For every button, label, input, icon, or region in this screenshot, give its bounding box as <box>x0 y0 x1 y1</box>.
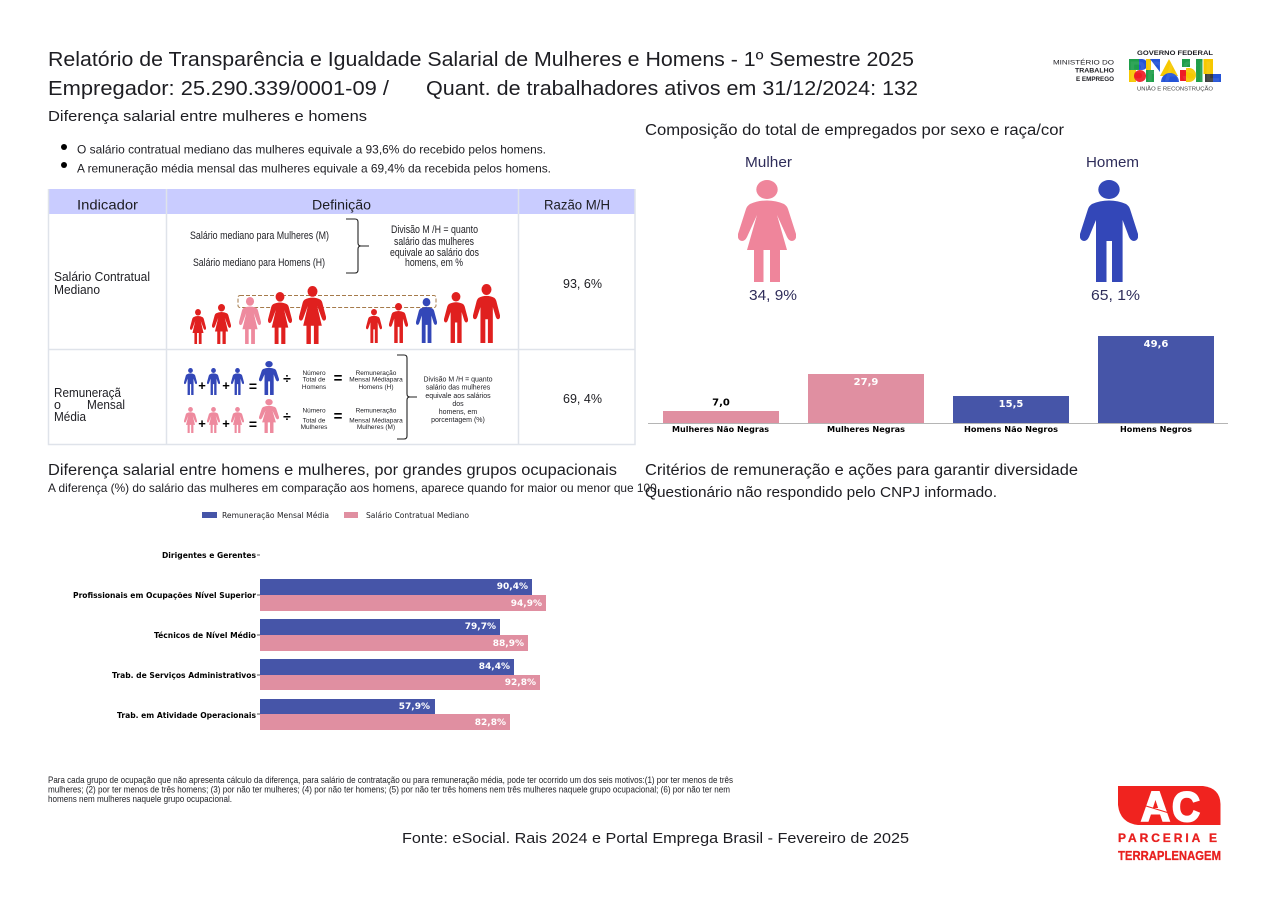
formula: remuneração média mulheres <box>184 399 403 433</box>
definition: salário mediano: salário das mulheres <box>394 236 474 248</box>
formula: remuneração média homens: Total de <box>303 376 326 384</box>
row label: remuneração média <box>54 386 125 424</box>
logo: AC Parceria e Terraplenagem <box>1118 783 1221 863</box>
bullet list: A remuneração média mensal das mulheres equivale a 69,4% da recebida pelos homens. <box>77 162 551 176</box>
bar chart: grupos ocupacionais: Profissionais em Ocupações Nível Superior <box>73 591 256 600</box>
formula: remuneração média mulheres: ÷ <box>283 408 291 424</box>
heading: diferença salarial: Diferença salarial entre mulheres e homens <box>48 108 367 125</box>
definition: divisão M/H remuneração: dos <box>452 401 464 408</box>
table header: Razão M/H <box>544 196 610 212</box>
logo: AC Parceria e Terraplenagem: C <box>1172 783 1200 830</box>
formula: remuneração média mulheres: Mulheres <box>301 424 328 431</box>
logo: Governo Federal Brasil: GOVERNO FEDERAL <box>1137 51 1213 57</box>
bar chart: grupos ocupacionais: Trab. de Serviços Administrativos <box>112 671 256 680</box>
footnote: Para cada grupo de ocupação que não apresenta cálculo da diferença, para salário de contratação ou para remuneração média, pode ter ocorrido um dos seis motivos:(1) por ter menos de três <box>48 775 733 785</box>
bar chart: composição por sexo e raça/cor: Homens Negros <box>1120 425 1192 434</box>
icon: homem 65,1% <box>1080 155 1140 304</box>
formula: remuneração média mulheres: Mensal Médiapara <box>349 418 403 424</box>
formula: remuneração média mulheres: = <box>249 416 257 432</box>
row label: salário contratual mediano <box>54 270 150 297</box>
definition: salário mediano <box>190 219 479 273</box>
bar chart: grupos ocupacionais: 57,9% <box>399 702 430 712</box>
icon: homem 65,1%: Homem <box>1086 155 1139 171</box>
heading: diferença por grupos ocupacionais: A diferença (%) do salário das mulheres em comparação aos homens, aparece quando for maior ou menor que 100. <box>48 481 660 495</box>
definition: divisão M/H remuneração: equivale aos salários <box>425 393 491 400</box>
logo: Ministério do Trabalho e Emprego: TRABALHO <box>1075 68 1114 74</box>
heading: critérios de remuneração: Critérios de remuneração e ações para garantir diversidade <box>645 462 1078 479</box>
bar chart: composição por sexo e raça/cor: Mulheres Não Negras <box>672 425 769 434</box>
value: razão remuneração média: 69, 4% <box>563 392 602 406</box>
bar chart: composição por sexo e raça/cor: Mulheres Negras <box>827 425 905 434</box>
bar chart: grupos ocupacionais: Dirigentes e Gerentes <box>162 551 256 560</box>
panel: tabela de indicadores <box>48 189 635 444</box>
row label: salário contratual mediano: Mediano <box>54 283 100 297</box>
definition: divisão M/H remuneração: porcentagem (%) <box>431 417 485 424</box>
bar chart: grupos ocupacionais <box>73 551 546 730</box>
definition: salário mediano: equivale ao salário dos <box>390 247 479 259</box>
logo: AC Parceria e Terraplenagem: A <box>1141 783 1170 830</box>
footnote <box>48 775 733 804</box>
bar chart: grupos ocupacionais: Trab. em Atividade Operacionais <box>117 711 256 720</box>
definition: divisão M/H remuneração: Divisão M /H = quanto <box>423 376 493 384</box>
logo: Ministério do Trabalho e Emprego: E EMPREGO <box>1076 77 1114 83</box>
logo: Ministério do Trabalho e Emprego <box>1053 60 1114 83</box>
formula: remuneração média mulheres: + <box>198 416 206 431</box>
bar chart: composição por sexo e raça/cor: 49,6 <box>1144 339 1168 350</box>
definition: salário mediano: Divisão M /H = quanto <box>391 224 478 236</box>
table header: Definição <box>312 196 371 212</box>
title: Empregador: 25.290.339/0001-09 / <box>48 78 389 100</box>
definition: salário mediano: Salário mediano para Mulheres (M) <box>190 230 329 242</box>
formula: remuneração média homens: Homens <box>302 384 327 391</box>
bar chart: grupos ocupacionais: 90,4% <box>497 582 528 592</box>
formula: remuneração média mulheres: = <box>334 408 343 425</box>
heading: diferença por grupos ocupacionais: Diferença salarial entre homens e mulheres, por grandes grupos ocupacionais <box>48 462 617 479</box>
bar chart: grupos ocupacionais: 94,9% <box>511 599 542 609</box>
formula: remuneração média homens: Homens (H) <box>358 384 394 391</box>
formula: remuneração média mulheres: Mulheres (M) <box>357 424 395 431</box>
bar chart: composição por sexo e raça/cor: 7,0 <box>712 398 730 408</box>
title: Quant. de trabalhadores ativos em 31/12/2024: 132 <box>426 78 918 100</box>
text: questionário não respondido: Questionário não respondido pelo CNPJ informado. <box>645 485 997 501</box>
source: Fonte: eSocial. Rais 2024 e Portal Emprega Brasil - Fevereiro de 2025 <box>402 830 909 847</box>
chart legend: Salário Contratual Mediano <box>366 511 469 520</box>
logo: AC Parceria e Terraplenagem: TERRAPLENAGEM <box>1118 849 1221 863</box>
formula: remuneração média homens: ÷ <box>283 370 291 386</box>
bar chart: composição por sexo e raça/cor <box>648 336 1228 434</box>
formula: remuneração média mulheres: Remuneração <box>356 408 397 414</box>
logo: Governo Federal Brasil: UNIÃO E RECONSTRUÇÃO <box>1137 86 1214 92</box>
formula: remuneração média mulheres: + <box>222 416 230 431</box>
formula: remuneração média homens: Mensal Médiapara <box>349 376 403 384</box>
title: Relatório de Transparência e Igualdade Salarial de Mulheres e Homens - 1º Semestre 2025 <box>48 49 914 71</box>
icon: homem 65,1%: 65, 1% <box>1091 288 1140 304</box>
value: razão salário contratual: 93, 6% <box>563 277 602 291</box>
bar chart: grupos ocupacionais: 88,9% <box>493 639 524 649</box>
formula: remuneração média mulheres: Total de <box>303 418 326 424</box>
icon: mulher 34,9%: Mulher <box>745 155 792 171</box>
row label: remuneração média: Média <box>54 410 86 424</box>
formula: remuneração média homens: Remuneração <box>356 370 397 377</box>
logo: Governo Federal Brasil: BRASIL <box>1129 56 1220 88</box>
formula: remuneração média homens: = <box>334 370 343 387</box>
row label: salário contratual mediano: Salário Contratual <box>54 270 150 284</box>
people illustration: median <box>190 284 500 344</box>
formula: remuneração média homens: + <box>222 378 230 393</box>
formula: remuneração média homens: = <box>249 378 257 394</box>
formula: remuneração média mulheres: Número <box>302 408 326 414</box>
bar chart: grupos ocupacionais: Técnicos de Nível Médio <box>154 630 256 640</box>
bullet list <box>61 142 551 176</box>
definition: salário mediano: homens, em % <box>405 257 463 269</box>
bar chart: grupos ocupacionais: 79,7% <box>465 622 496 632</box>
formula: remuneração média homens: Número <box>302 370 326 377</box>
heading: diferença por grupos ocupacionais <box>48 462 660 495</box>
bar chart: composição por sexo e raça/cor: 27,9 <box>854 377 878 388</box>
row label: remuneração média: Remuneraçã <box>54 386 121 400</box>
logo: Ministério do Trabalho e Emprego: MINISTÉRIO DO <box>1053 60 1114 66</box>
footnote: homens nem mulheres naquele grupo ocupacional. <box>48 794 232 804</box>
row label: remuneração média: o <box>54 398 61 412</box>
definition: divisão M/H remuneração: salário das mulheres <box>426 384 491 392</box>
formula: remuneração média homens <box>184 361 403 395</box>
formula: remuneração média homens: + <box>198 378 206 393</box>
table header <box>48 189 635 214</box>
definition: salário mediano: Salário mediano para Homens (H) <box>193 257 325 269</box>
logo: AC Parceria e Terraplenagem: PARCERIA E <box>1118 831 1217 845</box>
heading: composição: Composição do total de empregados por sexo e raça/cor <box>645 122 1064 139</box>
icon: mulher 34,9% <box>738 155 797 304</box>
bar chart: grupos ocupacionais: 84,4% <box>479 662 510 672</box>
table header: Indicador <box>77 196 138 212</box>
footnote: mulheres; (2) por ter menos de três homens; (3) por não ter mulheres; (4) por não ter homens; (5) por não ter três homens nem três mulheres naquele grupo ocupacional; (6) por não ter nem <box>48 784 730 794</box>
row label: remuneração média: Mensal <box>87 398 125 412</box>
chart legend: Remuneração Mensal Média <box>222 510 329 520</box>
title <box>48 49 918 100</box>
bar chart: grupos ocupacionais: 92,8% <box>505 678 536 688</box>
logo: Governo Federal Brasil <box>1129 51 1221 92</box>
bullet list: O salário contratual mediano das mulheres equivale a 93,6% do recebido pelos homens. <box>77 142 546 156</box>
bar chart: grupos ocupacionais: 82,8% <box>475 718 506 728</box>
definition: divisão M/H remuneração <box>397 355 493 439</box>
bar chart: composição por sexo e raça/cor: Homens Não Negros <box>964 425 1058 434</box>
icon: mulher 34,9%: 34, 9% <box>749 288 797 304</box>
bar chart: composição por sexo e raça/cor: 15,5 <box>999 399 1023 410</box>
definition: divisão M/H remuneração: homens, em <box>439 409 477 416</box>
chart legend <box>202 510 469 520</box>
